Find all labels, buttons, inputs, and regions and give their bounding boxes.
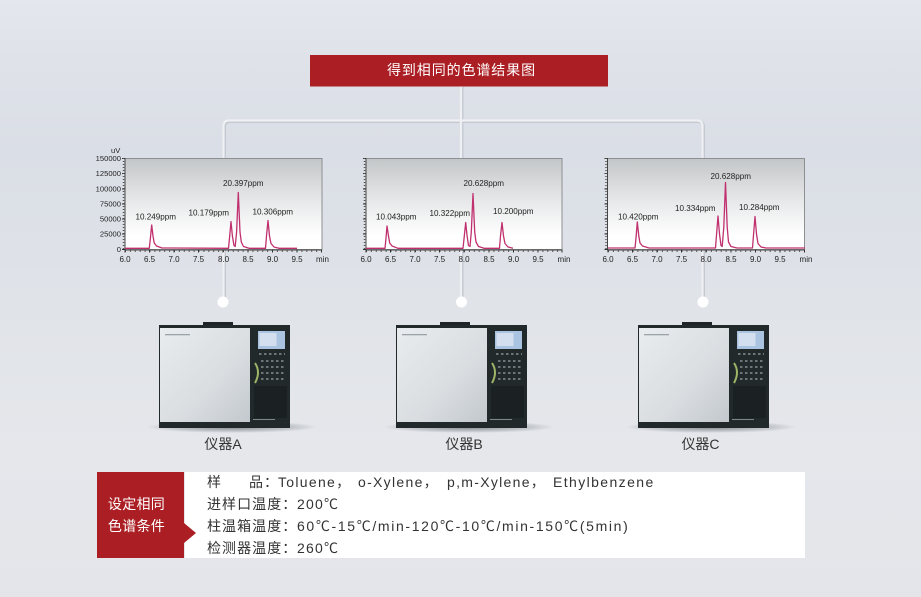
instrument A <box>146 322 318 433</box>
chart B: 10.200ppm <box>493 207 534 216</box>
chart B: 9.0 <box>508 255 520 264</box>
chart B: 20.628ppm <box>464 179 504 188</box>
chart A: 0 <box>117 245 121 254</box>
chart A: 9.0 <box>267 255 279 264</box>
conditions red tag: 设定相同 <box>108 496 165 512</box>
conditions list: 60℃-15℃/min-120℃-10℃/min-150℃(5min) <box>297 518 629 534</box>
conditions text background <box>185 472 805 558</box>
chart A: 10.249ppm <box>136 212 176 222</box>
conditions list: 柱温箱温度： <box>207 518 297 534</box>
conditions list: o-Xylene， <box>358 474 439 490</box>
chart A: 7.5 <box>193 255 205 264</box>
conditions panel <box>97 472 805 558</box>
chart A: uV <box>111 146 121 155</box>
conditions list: 进样口温度： <box>207 496 297 512</box>
connector dot C <box>698 296 708 308</box>
chart C: min <box>800 255 812 264</box>
chart C: 6.0 <box>602 255 614 264</box>
connector dot B <box>456 296 467 308</box>
chart C <box>602 158 812 264</box>
instrument C <box>625 322 797 433</box>
chromatogram trace A <box>125 192 297 248</box>
chart B: 7.0 <box>409 255 421 264</box>
label: instrument B: 仪器B <box>445 436 483 452</box>
conditions red tag <box>97 472 196 558</box>
conditions list: 200℃ <box>297 496 339 512</box>
conditions list: 品： <box>249 474 279 490</box>
chart C: 7.0 <box>651 255 663 264</box>
chart A: 25000 <box>100 230 121 238</box>
chart C: 10.284ppm <box>739 203 780 212</box>
chart A: 10.179ppm <box>188 208 229 218</box>
conditions list: Toluene， <box>278 474 351 490</box>
conditions list: Ethylbenzene <box>553 474 655 490</box>
chart A: 20.397ppm <box>223 179 264 188</box>
chart B: 9.5 <box>532 255 544 264</box>
chart B: 8.5 <box>483 255 495 264</box>
chart A: 7.0 <box>168 255 180 264</box>
chart C: 9.5 <box>774 255 786 264</box>
chart A: 75000 <box>100 200 121 208</box>
chart A: 125000 <box>96 169 121 178</box>
connector dot A <box>218 296 228 308</box>
chart A: 150000 <box>96 154 121 163</box>
chart B: 10.043ppm <box>376 212 417 222</box>
conditions red tag: 色谱条件 <box>108 518 165 534</box>
chart A: 6.5 <box>144 255 156 264</box>
chart A <box>96 146 329 264</box>
conditions list: 260℃ <box>297 540 339 556</box>
chart A: 8.0 <box>218 255 230 264</box>
conditions list: 样 <box>207 474 222 490</box>
chart C: 6.5 <box>627 255 639 264</box>
chart A: 8.5 <box>242 255 254 264</box>
chart B <box>360 158 570 264</box>
instrument B <box>383 322 555 433</box>
chart C: 7.5 <box>676 255 688 264</box>
chart A: 50000 <box>100 214 121 224</box>
chart B: 10.322ppm <box>430 209 470 218</box>
label: instrument C: 仪器C <box>681 436 720 452</box>
chart C: 10.420ppm <box>618 212 659 222</box>
chart B: 7.5 <box>434 255 446 264</box>
conditions list: p,m-Xylene， <box>447 474 546 490</box>
chart A: 9.5 <box>291 255 303 264</box>
chart A: 10.306ppm <box>252 208 293 216</box>
chart C: 8.5 <box>725 255 737 264</box>
chart C: 9.0 <box>750 255 762 264</box>
connector lines <box>224 86 704 303</box>
chart B: 6.5 <box>385 255 397 264</box>
chart B: 6.0 <box>360 255 372 264</box>
title banner: 得到相同的色谱结果图 <box>387 62 536 78</box>
conditions list: 检测器温度： <box>207 540 297 556</box>
chart B: 8.0 <box>458 255 470 264</box>
label: instrument A: 仪器A <box>204 436 242 452</box>
chromatogram trace C <box>608 182 805 248</box>
title banner <box>310 55 608 86</box>
chart A: min <box>316 255 329 264</box>
conditions list <box>207 474 655 556</box>
chart A: 100000 <box>96 184 121 194</box>
chart C: 20.628ppm <box>710 172 751 181</box>
chart B: min <box>558 255 570 264</box>
chart C: 8.0 <box>700 255 712 264</box>
chart C: 10.334ppm <box>675 204 716 213</box>
chromatogram trace B <box>366 194 513 248</box>
chart A: 6.0 <box>119 255 131 264</box>
